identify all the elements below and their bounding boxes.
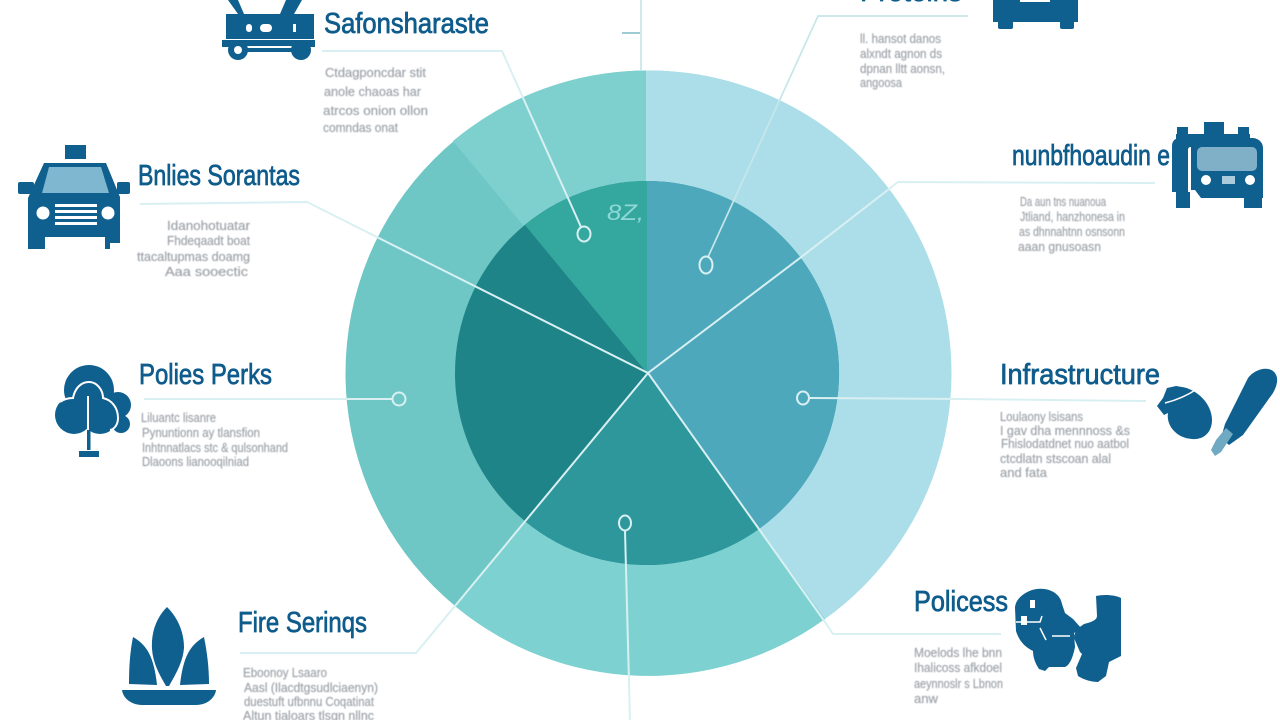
leader line [648, 373, 1001, 634]
icon: plant [122, 607, 216, 705]
callout: Fire Services [122, 373, 648, 720]
icon: car [18, 145, 130, 250]
body text: Inhtnnatlacs stc & qulsonhand [142, 441, 288, 455]
body text [860, 32, 945, 90]
body text [141, 411, 288, 469]
body text: aaan gnusoasn [1018, 240, 1101, 254]
body text: Fhislodatdnet nuo aatbol [1001, 437, 1129, 451]
leader line [648, 182, 1155, 373]
body text: alxndt agnon ds [860, 47, 942, 61]
body text: anole chaoas har [324, 85, 421, 99]
body text: Ihalicoss afkdoel [914, 661, 1002, 675]
body text: Loulaony lsisans [1000, 410, 1083, 424]
body text: Aaa sooectic [165, 265, 248, 279]
body text: and fata [1000, 466, 1047, 480]
chart: segmented donut [346, 70, 951, 676]
body text: Liluantc lisanre [141, 411, 216, 425]
body text: ctcdlatn stscoan alal [1000, 452, 1111, 466]
body text [323, 66, 428, 135]
callout: top tick [622, 0, 641, 70]
body text: as dhnnahtnn osnsonn [1019, 225, 1125, 239]
marker [619, 516, 631, 530]
leader line [625, 531, 630, 720]
callout: Polies Perks [55, 359, 406, 469]
icon: vehicle front [993, 0, 1078, 29]
callout: Bnlies Sorantas [18, 145, 648, 373]
body text [137, 219, 250, 279]
leader line [708, 16, 968, 257]
heading: Infrastructure [1000, 359, 1160, 391]
body text: Ctdagponcdar stit [325, 66, 427, 80]
callout: right bus [648, 122, 1263, 373]
body text: Dlaoons lianooqilniad [142, 455, 249, 469]
leader line [810, 398, 1146, 401]
heading: Policess [914, 586, 1008, 618]
body text: anw [914, 692, 939, 706]
marker [578, 226, 590, 242]
body text: ll. hansot danos [860, 32, 941, 46]
body text: Aasl (Ilacdtgsudlciaenyn) [244, 681, 378, 695]
body text: duestuft ufbnnu Coqatinat [244, 695, 374, 709]
heading: nunbfhoaudin e [1012, 140, 1170, 172]
icon: tools [1157, 369, 1277, 456]
body text [914, 646, 1003, 706]
leader line [144, 398, 392, 400]
body text: Da aun tns nuanoua [1020, 195, 1106, 209]
body text [243, 666, 378, 720]
callout: Policess [648, 373, 1121, 706]
body text [1018, 195, 1125, 254]
callout: Safonsharaste [222, 0, 590, 242]
body text [1000, 410, 1130, 480]
outer ring segments [346, 70, 951, 676]
leader line [240, 373, 648, 653]
body text: Eboonoy Lsaaro [243, 666, 327, 680]
icon: truck [222, 0, 315, 60]
leader line [322, 51, 581, 227]
body text: angoosa [860, 76, 902, 90]
body text: atrcos onion ollon [323, 104, 428, 118]
body text: Idanohotuatar [167, 219, 250, 233]
heading: Polies Perks [139, 359, 272, 391]
body text: Fhdeqaadt boat [167, 234, 250, 248]
body text: comndas onat [323, 121, 398, 135]
marker [797, 392, 809, 404]
marker [392, 392, 406, 406]
leader tick [622, 32, 640, 34]
body text: Jtliand, hanzhonesa in [1020, 210, 1125, 224]
body text: ttacaltupmas doamg [137, 250, 250, 264]
heading: Bnlies Sorantas [138, 160, 300, 192]
heading: Fire Serinqs [238, 607, 367, 639]
icon: paired shapes [1015, 589, 1121, 682]
body text: I gav dha mennnoss &s [1000, 424, 1130, 438]
body text: Moelods lhe bnn [914, 646, 1002, 660]
body text: aeynnoslr s Lbnon [914, 677, 1003, 691]
callout: top right [700, 0, 1078, 274]
leader line [140, 202, 648, 373]
callout: Infrastructure [797, 359, 1277, 480]
body text: Pynuntionn ay tlansfion [142, 426, 260, 440]
callout: bottom leader [619, 516, 631, 720]
icon: tree [55, 365, 131, 457]
center label: 8Z, [607, 200, 644, 225]
heading: Safonsharaste [324, 8, 489, 40]
icon: bus [1172, 122, 1263, 208]
marker [700, 256, 712, 274]
leader line [640, 0, 642, 70]
body text: dpnan lltt aonsn, [860, 62, 945, 76]
inner pie segments [455, 181, 839, 565]
